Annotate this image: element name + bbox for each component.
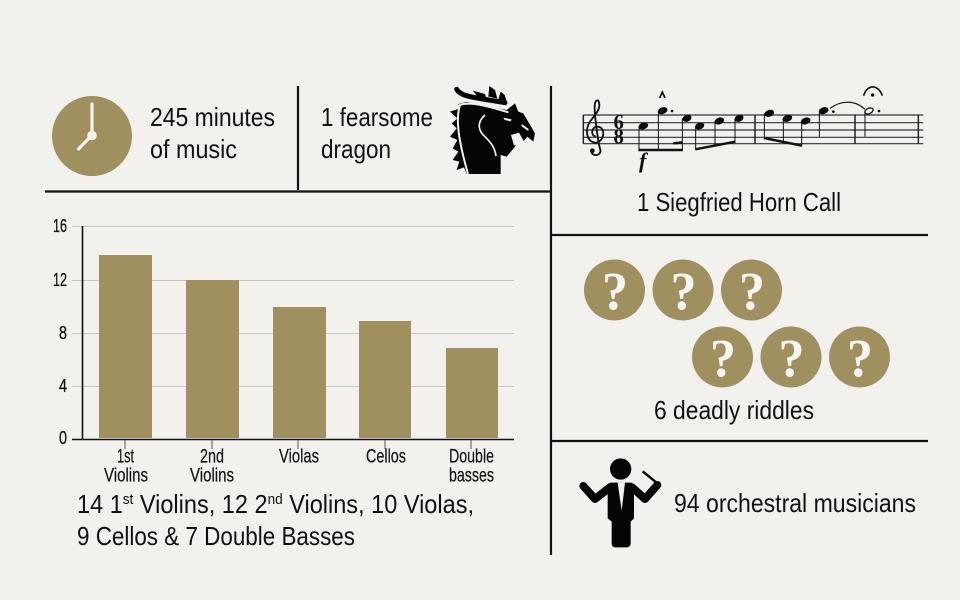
icon: conductor xyxy=(583,458,657,547)
y axis labels: 8 xyxy=(59,323,67,343)
treble clef xyxy=(587,100,603,155)
time signature xyxy=(614,112,624,148)
half note, slur and fermata xyxy=(864,107,874,115)
icon: dragon head xyxy=(450,86,535,174)
chart: section counts xyxy=(53,216,514,486)
icons: question mark circles xyxy=(584,260,890,388)
text: riddles caption: 6 deadly riddles xyxy=(654,395,814,425)
time signature: 8 xyxy=(614,126,624,148)
x axis labels: Violins xyxy=(104,466,148,486)
y axis labels: 12 xyxy=(53,270,67,290)
text: minutes of music: 245 minutes xyxy=(150,102,275,132)
stems and beams xyxy=(639,111,865,150)
x axis labels: 2nd xyxy=(200,446,224,468)
icon: Siegfried horn call score xyxy=(583,87,923,173)
y axis labels: 0 xyxy=(59,428,67,448)
bars xyxy=(99,255,498,438)
x axis labels xyxy=(104,446,494,486)
x axis labels: Double xyxy=(449,446,494,468)
x axis labels: Violins xyxy=(190,466,234,486)
icon: clock xyxy=(52,96,132,176)
text: minutes of music second line: of music xyxy=(150,134,237,164)
noteheads xyxy=(637,93,880,131)
dynamic and accent marks: f xyxy=(639,148,649,173)
text: section summary line one: Violins, 12 2 xyxy=(133,489,268,519)
x axis labels: Violas xyxy=(279,446,319,468)
x axis labels: basses xyxy=(449,466,494,486)
y axis labels: 16 xyxy=(53,216,67,236)
icons: question mark circles: ? xyxy=(739,261,765,321)
text: dragon: dragon xyxy=(321,134,391,164)
icons: question mark circles: ? xyxy=(847,328,873,388)
y axis labels: 4 xyxy=(59,376,67,396)
text: section summary line one: 14 1 xyxy=(77,489,128,519)
text: musicians caption: 94 orchestral musicians xyxy=(674,488,916,518)
x axis labels: Cellos xyxy=(366,446,406,468)
x axis labels: 1st xyxy=(117,446,134,468)
text: section summary line one: nd xyxy=(268,491,283,508)
text: section summary line one: st xyxy=(123,491,134,508)
icons: question mark circles: ? xyxy=(710,328,736,388)
text: fearsome: 1 fearsome xyxy=(321,102,433,132)
text: section summary line two: 9 Cellos & 7 Double Basses xyxy=(77,521,355,551)
icons: question mark circles: ? xyxy=(778,328,804,388)
icons: question mark circles: ? xyxy=(602,261,628,321)
icons: question mark circles: ? xyxy=(670,261,696,321)
y axis labels xyxy=(53,216,67,448)
text: horn call caption: 1 Siegfried Horn Call xyxy=(637,187,841,217)
text: section summary line one: Violins, 10 Violas, xyxy=(283,489,474,519)
time signature: 6 xyxy=(614,112,624,134)
